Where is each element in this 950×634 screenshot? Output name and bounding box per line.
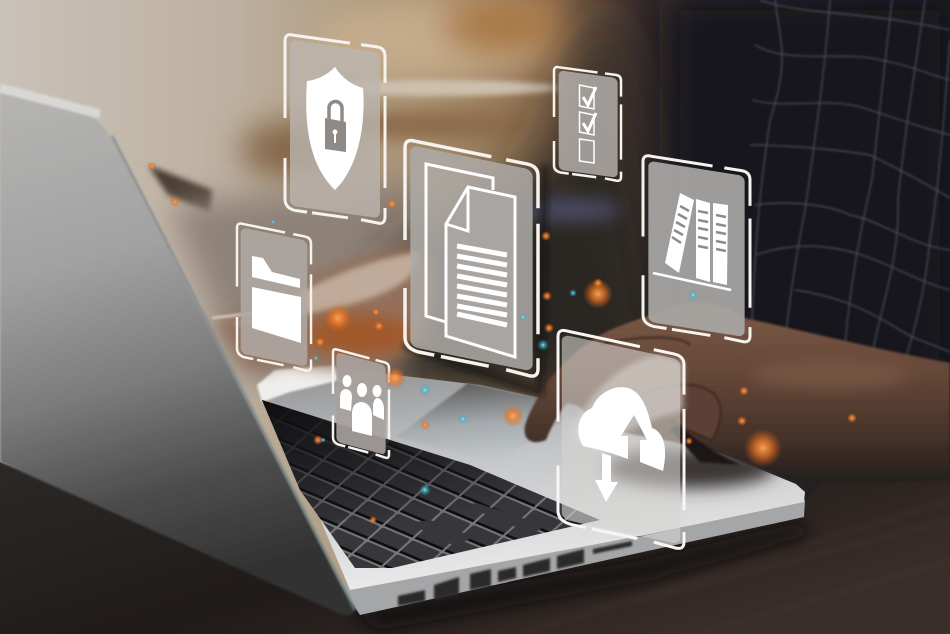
fingers seen through the cloud panel [570, 355, 684, 455]
trackpad [396, 383, 600, 463]
icon: check boxes [580, 85, 596, 163]
wooden table [0, 455, 950, 634]
keyboard [262, 400, 600, 568]
icon: document pages [426, 164, 515, 357]
thumb and finger creases [600, 338, 690, 345]
plaid shirt [750, 0, 950, 360]
icon: binders on shelf [653, 193, 731, 290]
hand shadow on base [605, 448, 775, 488]
base shadow [350, 522, 810, 630]
icon: shield with padlock [306, 67, 364, 190]
bokeh light particles [148, 162, 857, 524]
panel: cloud transfer [558, 329, 684, 550]
top surface [260, 366, 805, 590]
laptop screen back [0, 88, 355, 615]
panel: team [333, 348, 389, 459]
panel: security shield [285, 34, 385, 224]
laptop base [250, 365, 810, 630]
icon: group of people [340, 375, 384, 436]
panel: folder [237, 223, 311, 372]
icon: folder [252, 256, 301, 343]
left hand [212, 248, 436, 369]
panel: binders [643, 155, 750, 343]
panel: documents [403, 139, 545, 392]
ports [398, 541, 632, 606]
front edge with ports [340, 500, 805, 615]
right hand [525, 303, 950, 482]
icon: cloud with up and down arrows [578, 387, 665, 502]
white slab behind left hand [257, 365, 340, 402]
panel: checklist [554, 67, 621, 181]
